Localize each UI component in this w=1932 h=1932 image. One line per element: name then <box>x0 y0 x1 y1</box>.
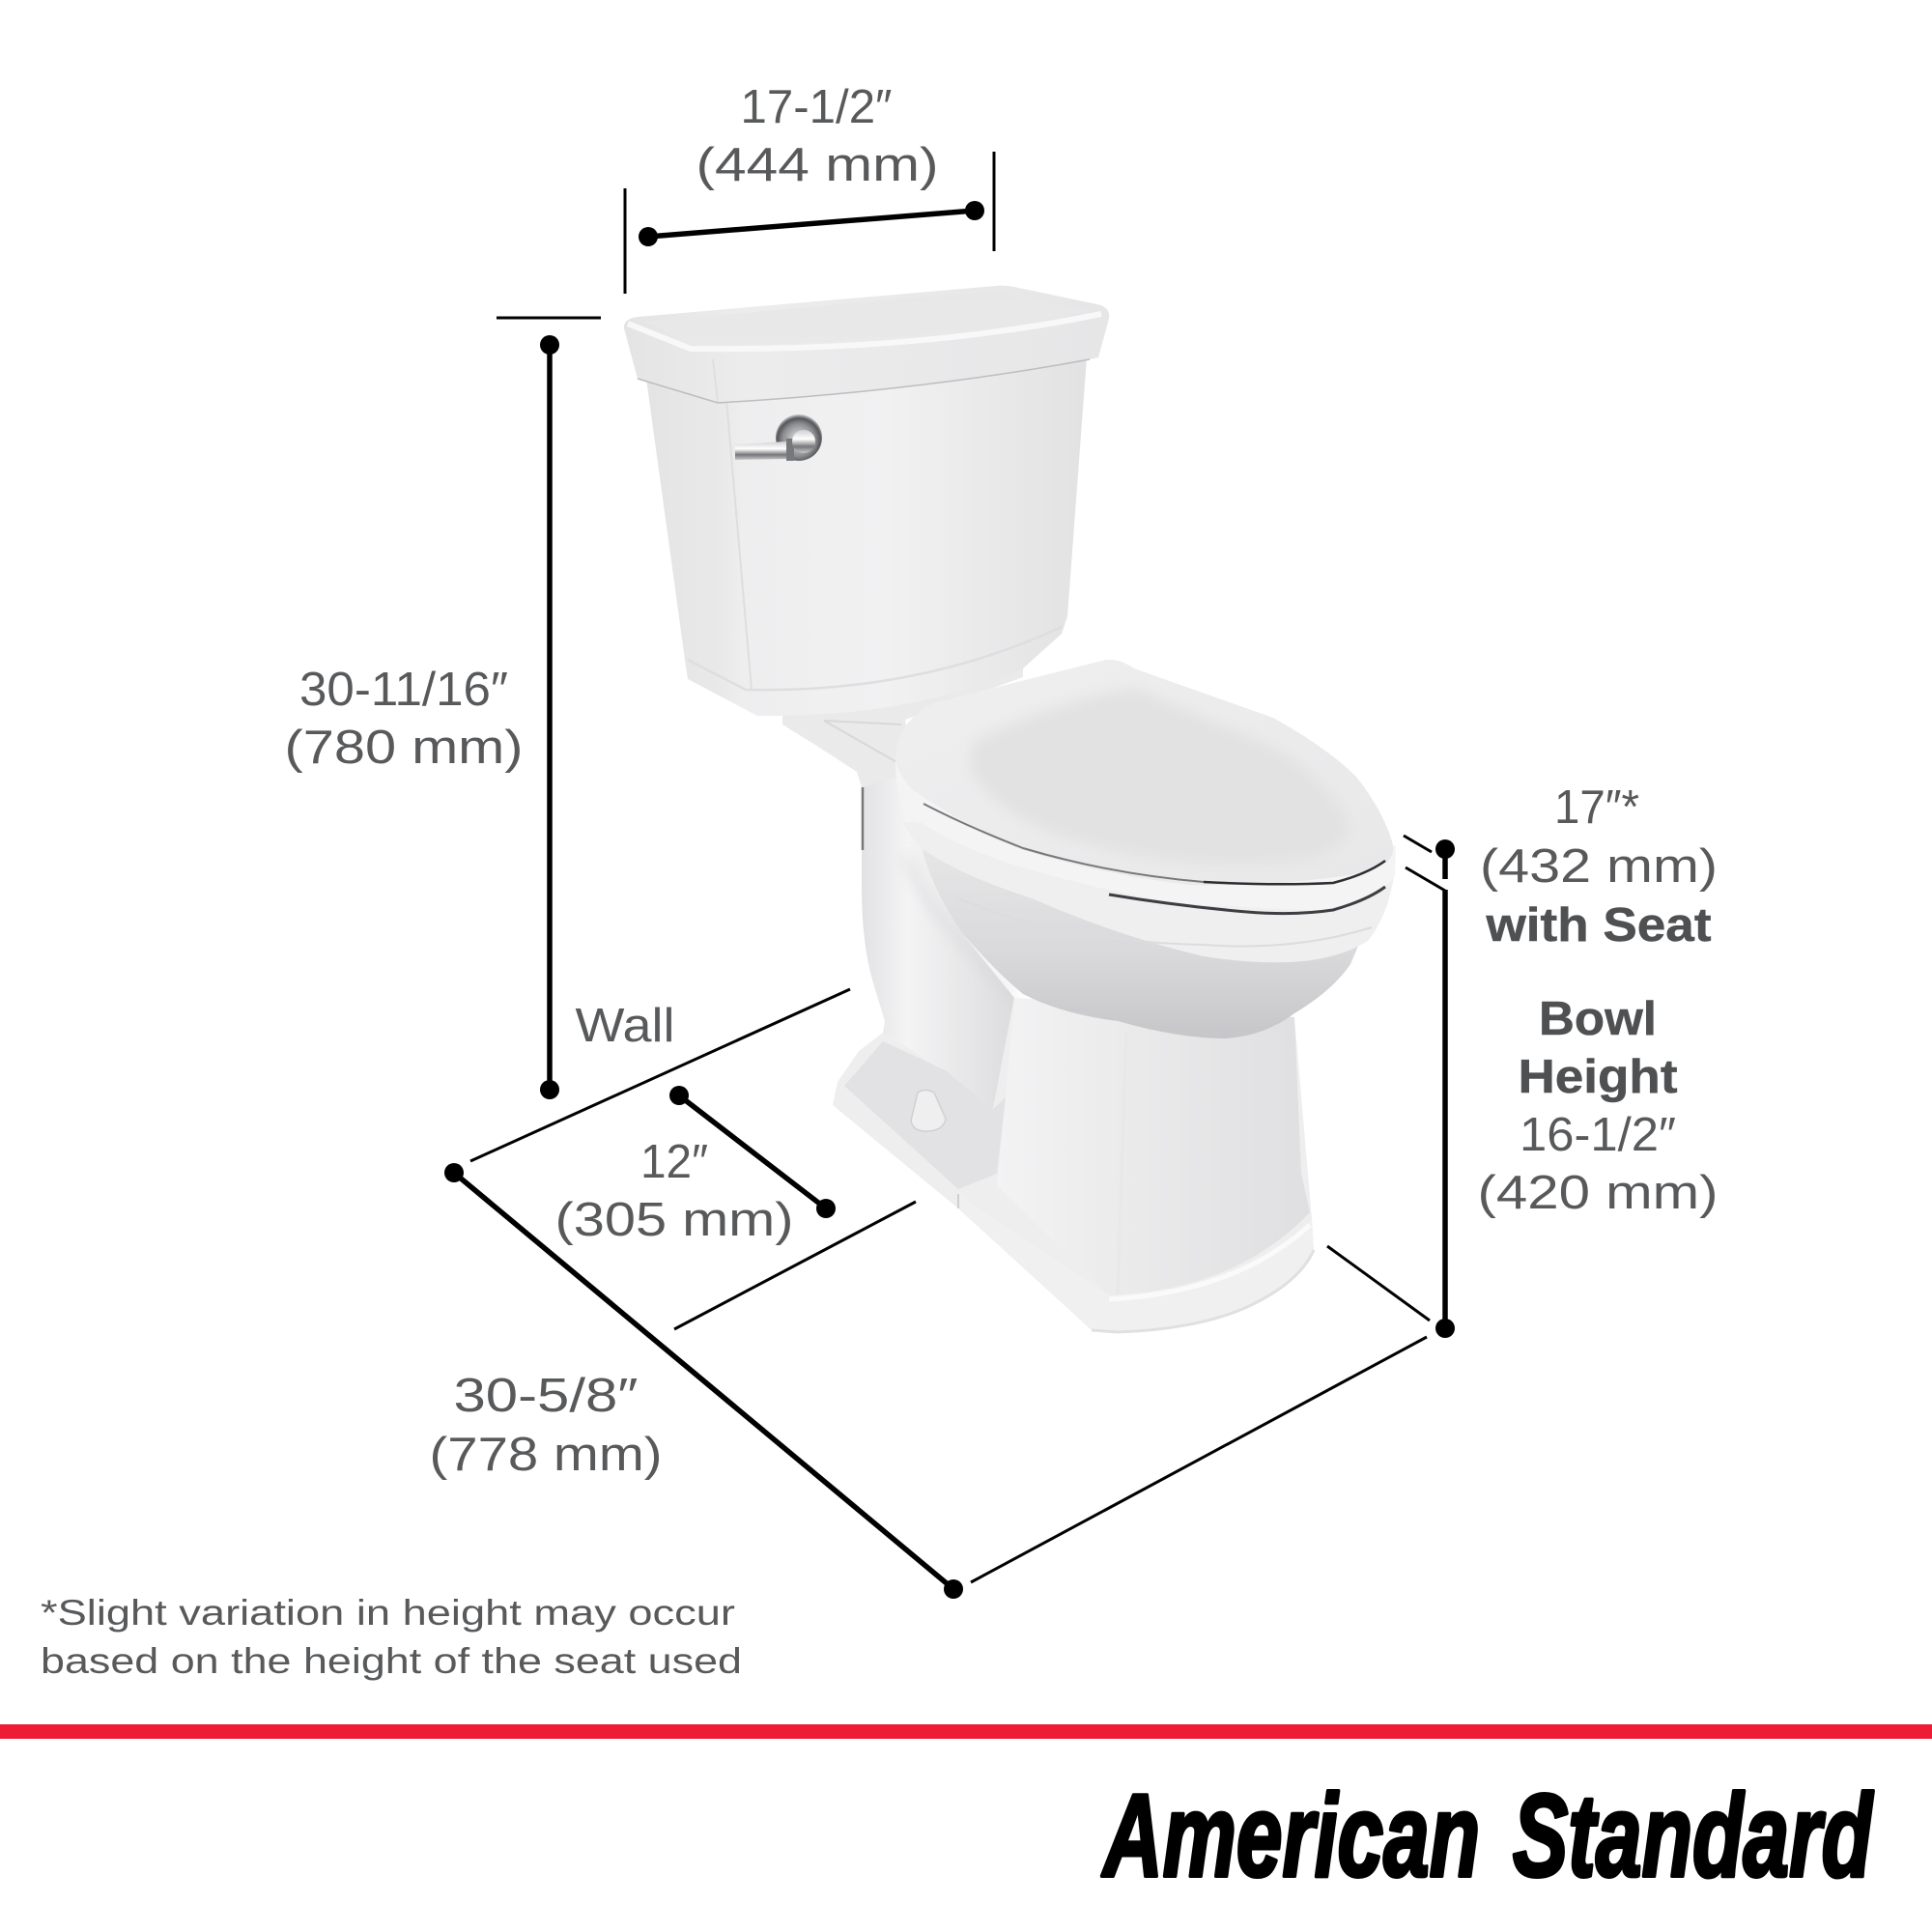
logo: American Standard: American <box>1101 1770 1480 1901</box>
label: overall height: 30-11/16″ <box>299 664 508 716</box>
dimension: overall depth <box>444 1163 1430 1599</box>
wall reference line <box>470 989 850 1161</box>
bowl rim <box>902 822 1394 962</box>
label: bowl height <box>1478 993 1718 1219</box>
footnote: based on the height of the seat used <box>41 1641 742 1681</box>
label: bowl height: Bowl <box>1539 993 1657 1045</box>
label: bowl height: Height <box>1519 1051 1677 1103</box>
toilet illustration <box>624 286 1396 1332</box>
logo: American Standard <box>1101 1770 1874 1901</box>
label: height with seat: with Seat <box>1485 899 1712 952</box>
bowl <box>923 850 1391 1038</box>
dimension: seat and bowl height <box>1404 836 1455 1338</box>
label: rough-in: (305 mm) <box>554 1194 794 1246</box>
label: bowl height: 16-1/2″ <box>1520 1109 1676 1161</box>
dimension: rough-in <box>669 1086 916 1329</box>
label: height with seat: 17″* <box>1554 781 1639 834</box>
label: bowl height: (420 mm) <box>1478 1167 1718 1219</box>
label: tank width: 17-1/2″ <box>740 81 893 133</box>
label: overall depth: (778 mm) <box>429 1429 663 1481</box>
label: height with seat: (432 mm) <box>1480 840 1718 893</box>
footnote: *Slight variation in height may occur <box>41 1593 735 1633</box>
red divider bar <box>0 1724 1932 1739</box>
trapway rear <box>862 763 1014 1109</box>
base and pedestal <box>833 998 1314 1332</box>
seat ring <box>895 755 1396 912</box>
tank body <box>646 357 1087 716</box>
label: rough-in: 12″ <box>640 1136 708 1188</box>
footnote <box>41 1593 742 1681</box>
label: overall depth <box>429 1370 663 1481</box>
tank lid <box>624 286 1109 403</box>
dimension: overall height <box>497 318 601 1099</box>
dimension: tank width <box>625 152 994 294</box>
label: rough-in <box>554 1136 794 1246</box>
label: tank width <box>696 81 939 191</box>
label: overall depth: 30-5/8″ <box>454 1370 638 1422</box>
label: overall height: (780 mm) <box>284 722 524 774</box>
label: height with seat <box>1480 781 1718 952</box>
seat lid <box>895 660 1393 885</box>
label: overall height <box>284 664 524 774</box>
bolt cap <box>911 1090 946 1131</box>
spout neck <box>782 667 1023 787</box>
label: tank width: (444 mm) <box>696 139 939 191</box>
label: wall: Wall <box>576 1000 674 1052</box>
flush handle <box>735 414 822 461</box>
